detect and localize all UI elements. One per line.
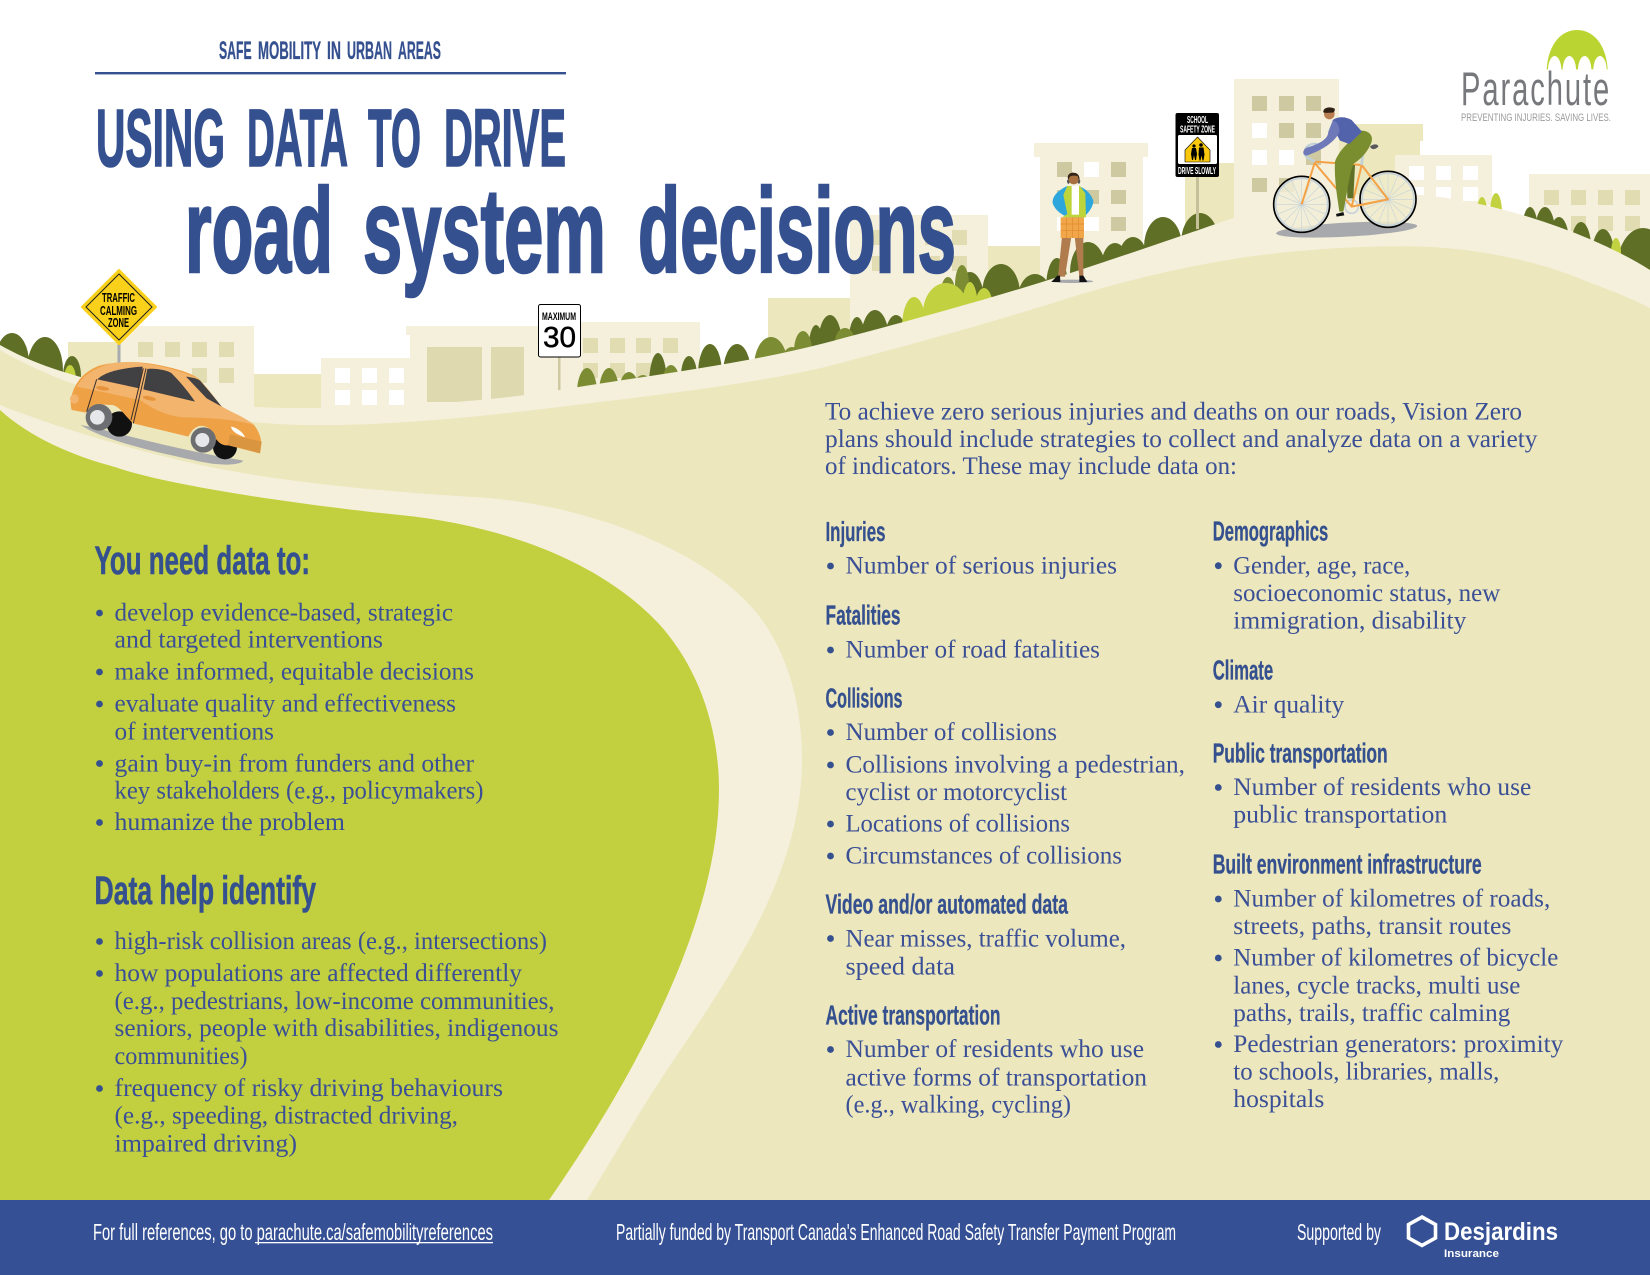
indicator: video and automated data: Near misses, traffic volume, <box>846 925 1126 952</box>
footer: funding note: Partially funded by Transport Canada's Enhanced Road Safety Transfer Payment Program <box>616 1219 1176 1245</box>
footer band <box>0 1200 1650 1275</box>
indicator: fatalities <box>826 599 1100 664</box>
list: what data identify <box>96 928 558 1158</box>
indicator: injuries: Number of serious injuries <box>846 552 1117 580</box>
sign: school safety zone: SCHOOL <box>1187 115 1208 126</box>
header rule <box>95 72 566 74</box>
indicator: climate: Climate <box>1213 654 1273 685</box>
list: reasons for data: evaluate quality and effectiveness <box>114 691 456 718</box>
kicker: safe mobility: SAFE <box>219 37 252 65</box>
indicator: public transportation <box>1213 737 1531 828</box>
indicator: injuries: Injuries <box>826 516 886 547</box>
indicator: climate: Air quality <box>1233 691 1345 718</box>
indicator: collisions: cyclist or motorcyclist <box>846 779 1067 806</box>
sign: school safety zone: SAFETY ZONE <box>1180 124 1215 136</box>
list: what data identify: communities) <box>114 1043 248 1070</box>
list: reasons for data <box>96 600 483 836</box>
intro paragraph: of indicators. These may include data on: <box>825 453 1237 480</box>
hill fill: beige panel <box>0 246 1650 1200</box>
sign: maximum 30 <box>538 304 580 357</box>
indicator: fatalities: Number of road fatalities <box>846 636 1100 664</box>
title line two: decisions <box>638 164 956 298</box>
list: what data identify: (e.g., pedestrians, low-income communities, <box>114 988 554 1015</box>
indicator: built environment infrastructure: to schools, libraries, malls, <box>1233 1059 1499 1086</box>
list: what data identify: seniors, people with disabilities, indigenous <box>114 1015 558 1042</box>
indicator: demographics: Demographics <box>1213 516 1328 547</box>
intro paragraph <box>825 398 1538 480</box>
sign: traffic calming zone: CALMING <box>100 303 137 318</box>
green panel <box>0 410 719 1200</box>
list: reasons for data: key stakeholders (e.g., policymakers) <box>114 777 484 804</box>
indicator: built environment infrastructure: Pedestrian generators: proximity <box>1233 1031 1564 1058</box>
indicator: fatalities: Fatalities <box>826 599 900 630</box>
heading: data help identify: Data help identify <box>94 869 316 913</box>
indicator: collisions: Circumstances of collisions <box>846 842 1122 870</box>
text: AREAS <box>398 37 441 65</box>
indicator: demographics <box>1213 516 1500 634</box>
intro paragraph: To achieve zero serious injuries and deaths on our roads, Vision Zero <box>825 398 1522 425</box>
title line one <box>96 93 566 184</box>
list: reasons for data: of interventions <box>114 719 274 746</box>
indicator: built environment infrastructure: streets, paths, transit routes <box>1233 913 1511 940</box>
indicator: demographics: socioeconomic status, new <box>1233 580 1500 607</box>
title line one: TO <box>368 93 421 184</box>
list: reasons for data: humanize the problem <box>114 809 346 836</box>
title line one: USING <box>96 93 225 184</box>
indicator: collisions: Number of collisions <box>846 719 1057 746</box>
footer: references: For full references, go to parachute.ca/safemobilityreferences <box>93 1219 493 1245</box>
indicator: built environment infrastructure: Built environment infrastructure <box>1213 848 1482 879</box>
panel: you need data to <box>94 539 484 836</box>
title line one: DATA <box>247 93 348 184</box>
panel: data help identify <box>94 869 558 1158</box>
list: reasons for data: and targeted interventions <box>114 627 383 654</box>
text: DRIVE <box>444 93 566 184</box>
indicator: collisions: Locations of collisions <box>846 810 1070 838</box>
logo: Desjardins <box>1408 1217 1558 1260</box>
list: reasons for data: gain buy-in from funders and other <box>114 750 475 777</box>
indicator: built environment infrastructure <box>1213 848 1564 1113</box>
sign: traffic calming zone: TRAFFIC <box>102 290 135 305</box>
indicator: active transportation: Active transportation <box>826 999 1000 1030</box>
winding road band <box>0 405 802 1200</box>
intro paragraph: plans should include strategies to collect and analyze data on a variety <box>825 426 1538 453</box>
sign: school safety zone <box>1176 113 1219 229</box>
footer: supported by: Supported by <box>1297 1219 1381 1245</box>
list: what data identify: impaired driving) <box>114 1131 297 1158</box>
list: what data identify: high-risk collision areas (e.g., intersections) <box>114 928 547 955</box>
logo: Parachute: Parachute <box>1461 64 1609 116</box>
shrubs along the road <box>0 193 1650 418</box>
indicator: built environment infrastructure: Number of kilometres of roads, <box>1233 886 1550 913</box>
sign: traffic calming zone: ZONE <box>108 315 129 330</box>
title line two: road <box>185 164 333 298</box>
indicator: public transportation: Public transportation <box>1213 737 1388 768</box>
indicator: active transportation: Number of residents who use <box>846 1036 1144 1063</box>
indicator: active transportation: (e.g., walking, cycling) <box>846 1091 1071 1118</box>
logo: Desjardins: Insurance <box>1444 1248 1499 1260</box>
sign pole: 30 sign <box>558 357 560 393</box>
indicator: injuries <box>826 516 1117 580</box>
indicator: video and automated data: speed data <box>846 953 955 980</box>
indicator: active transportation: active forms of transportation <box>846 1064 1148 1091</box>
indicator: built environment infrastructure: Number of kilometres of bicycle <box>1233 945 1558 972</box>
sign: traffic calming zone <box>82 270 156 376</box>
cyclist <box>1274 107 1418 240</box>
city skyline buildings <box>68 79 1650 411</box>
title line two: system <box>363 164 606 298</box>
indicator: built environment infrastructure: paths, trails, traffic calming <box>1233 1000 1511 1027</box>
indicator: demographics: immigration, disability <box>1233 607 1467 634</box>
list: what data identify: how populations are affected differently <box>114 960 522 987</box>
logo: Desjardins: Desjardins <box>1444 1218 1558 1246</box>
indicator: video and automated data: Video and/or automated data <box>826 888 1068 919</box>
indicators column one <box>826 516 1185 1118</box>
list: reasons for data: make informed, equitable decisions <box>114 659 474 686</box>
sign: school safety zone: DRIVE SLOWLY <box>1178 166 1216 177</box>
road hill: outer edge <box>0 194 1650 1200</box>
logo: Parachute <box>1461 30 1611 124</box>
list: reasons for data: develop evidence-based, strategic <box>114 600 453 627</box>
indicator: built environment infrastructure: hospitals <box>1233 1086 1324 1113</box>
indicator: collisions <box>826 682 1185 870</box>
indicator: collisions: Collisions <box>826 682 902 713</box>
indicator: climate <box>1213 654 1345 718</box>
indicator: built environment infrastructure: lanes, cycle tracks, multi use <box>1233 972 1520 1000</box>
person standing <box>1051 173 1093 283</box>
indicator: public transportation: public transportation <box>1233 801 1448 828</box>
car <box>70 362 262 465</box>
kicker: safe mobility: URBAN <box>347 37 392 65</box>
kicker: safe mobility <box>219 37 441 65</box>
indicator: demographics: Gender, age, race, <box>1233 552 1410 579</box>
indicator: collisions: Collisions involving a pedestrian, <box>846 751 1185 778</box>
list: what data identify: (e.g., speeding, distracted driving, <box>114 1103 458 1130</box>
kicker: safe mobility: MOBILITY <box>258 37 321 65</box>
indicators column two <box>1213 516 1564 1113</box>
indicator: active transportation <box>826 999 1148 1118</box>
indicator: video and automated data <box>826 888 1126 980</box>
sign: maximum 30: 30 <box>543 322 576 354</box>
list: what data identify: frequency of risky driving behaviours <box>114 1075 503 1102</box>
title line two <box>185 164 956 298</box>
heading: you need data to: You need data to: <box>94 539 310 583</box>
sign: maximum 30: MAXIMUM <box>542 311 576 323</box>
kicker: safe mobility: IN <box>327 37 341 65</box>
indicator: public transportation: Number of residents who use <box>1233 774 1531 801</box>
